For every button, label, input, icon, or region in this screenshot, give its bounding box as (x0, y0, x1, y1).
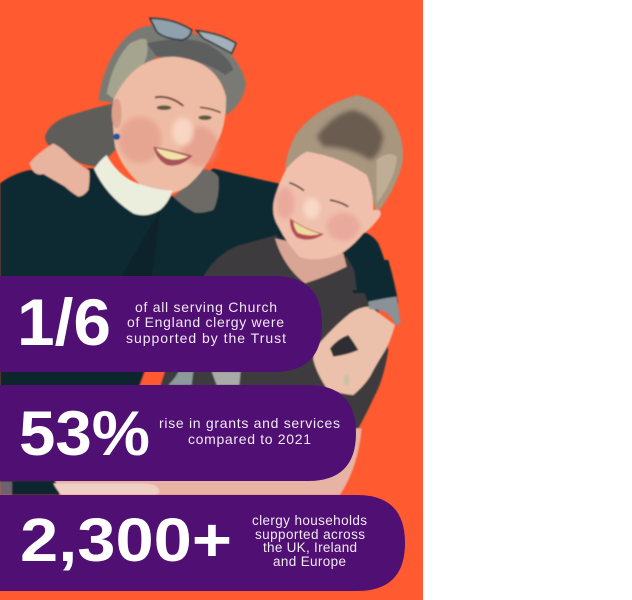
stat description: compared to 2021 (188, 431, 311, 447)
orange background panel (0, 0, 423, 600)
stat pill: 2,300+ (0, 495, 405, 591)
woman's hand on shoulder (29, 143, 90, 197)
stat description: and Europe (273, 554, 346, 569)
stat description: of all serving Church (135, 299, 277, 315)
boy's smile (290, 218, 324, 240)
stat pill: 1/6 (0, 276, 322, 372)
sunglasses on head (150, 18, 192, 40)
stat description: clergy households (252, 513, 367, 528)
clerical collar (94, 155, 173, 215)
stat description: rise in grants and services (159, 415, 340, 431)
earring (113, 133, 120, 140)
woman's long hair (29, 18, 403, 259)
woman's sweater and arm (0, 168, 392, 293)
stat description: of England clergy were (127, 314, 284, 330)
woman's hand, wrist and watch (313, 260, 401, 395)
boy's face (273, 152, 381, 259)
photo: woman and boy embracing (0, 18, 403, 495)
boy's eyes (289, 183, 304, 191)
stat description: supported across (255, 527, 365, 542)
stat number: 53% (19, 399, 150, 469)
woman's eyes and brows (155, 97, 183, 106)
stat description: the UK, Ireland (263, 540, 357, 555)
boy's shirt and lower body (0, 250, 388, 495)
boy's neck (275, 238, 347, 283)
woman's smile (153, 147, 193, 166)
boy's shirt collar area (203, 235, 287, 283)
stat pill: 53% (0, 385, 356, 481)
woman's face (113, 57, 226, 194)
stat number: 1/6 (17, 285, 111, 359)
stat number: 2,300+ (20, 506, 232, 574)
stat description: supported by the Trust (126, 330, 286, 346)
woman's hair top (98, 25, 246, 115)
boy's hair (285, 95, 403, 213)
